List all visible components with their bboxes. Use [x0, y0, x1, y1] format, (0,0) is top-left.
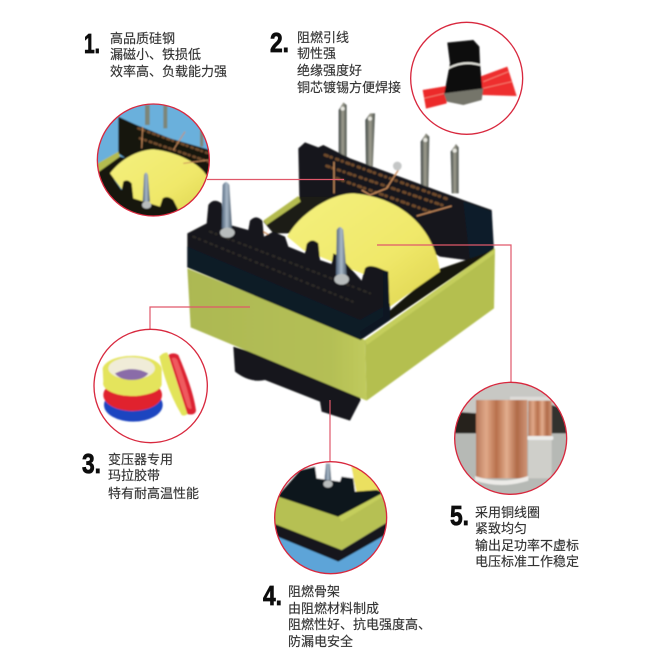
front pins — [220, 182, 349, 285]
yellow coil — [287, 193, 440, 307]
description 3: 变压器专用 — [108, 452, 173, 467]
number 4: 4. — [263, 580, 282, 611]
callout 2 text — [270, 27, 401, 95]
description 1: 高品质硅钢 — [110, 31, 175, 46]
circle 3 ring — [94, 329, 207, 443]
frame specks — [193, 232, 370, 303]
description 5: 输出足功率不虚标 — [475, 538, 579, 553]
leader lines — [150, 180, 511, 462]
circle 4 ring — [275, 462, 387, 574]
description 4: 阻燃性好、抗电强度高、 — [288, 617, 431, 632]
callout 1 text — [84, 28, 227, 79]
number 2: 2. — [270, 27, 289, 58]
circle 2 ring — [411, 22, 523, 134]
description 2: 韧性强 — [297, 46, 336, 61]
description 4: 阻燃骨架 — [288, 584, 340, 599]
description 1: 漏磁小、铁损低 — [110, 47, 201, 62]
description 1: 效率高、负载能力强 — [110, 64, 227, 79]
number 3: 3. — [82, 448, 101, 479]
number 1: 1. — [84, 28, 100, 59]
description 3: 玛拉胶带 — [108, 468, 160, 483]
description 5: 电压标准工作稳定 — [475, 554, 579, 569]
back wall of bobbin — [298, 142, 494, 261]
description 2: 阻燃引线 — [297, 30, 349, 45]
yellow band — [187, 248, 495, 401]
inner floor — [263, 197, 333, 233]
circle 3: mylar tapes — [94, 329, 207, 443]
callout 4 text — [263, 580, 431, 649]
circle 5: copper wire spools — [453, 380, 570, 497]
description 4: 由阻燃材料制成 — [288, 601, 379, 616]
wire bundle — [423, 40, 517, 109]
description 2: 铜芯镀锡方便焊接 — [297, 80, 401, 95]
description 3: 特有耐高温性能 — [108, 486, 199, 501]
pin tips — [341, 107, 457, 153]
number 5: 5. — [450, 500, 469, 531]
tabs shade — [360, 270, 390, 338]
front frame — [187, 201, 390, 340]
circle 4: bobbin detail — [273, 460, 388, 575]
description 4: 防漏电安全 — [288, 634, 353, 649]
wall specks — [325, 155, 450, 212]
solder tip — [393, 162, 402, 170]
description 5: 采用铜线圈 — [475, 505, 540, 520]
main transformer — [187, 102, 495, 421]
bottom black bobbin — [233, 347, 361, 421]
callout 5 text — [450, 500, 579, 569]
back pins — [339, 102, 459, 193]
description 2: 绝缘强度好 — [297, 63, 362, 78]
circle 1 ring — [97, 104, 209, 216]
callout 3 text — [82, 448, 199, 501]
circle 1: coil detail — [96, 103, 210, 217]
circle 2: lead wires — [411, 22, 523, 134]
circle 5 ring — [455, 382, 567, 494]
copper wires — [263, 162, 452, 237]
description 5: 紧致均匀 — [475, 521, 527, 536]
tape rolls — [103, 353, 196, 422]
